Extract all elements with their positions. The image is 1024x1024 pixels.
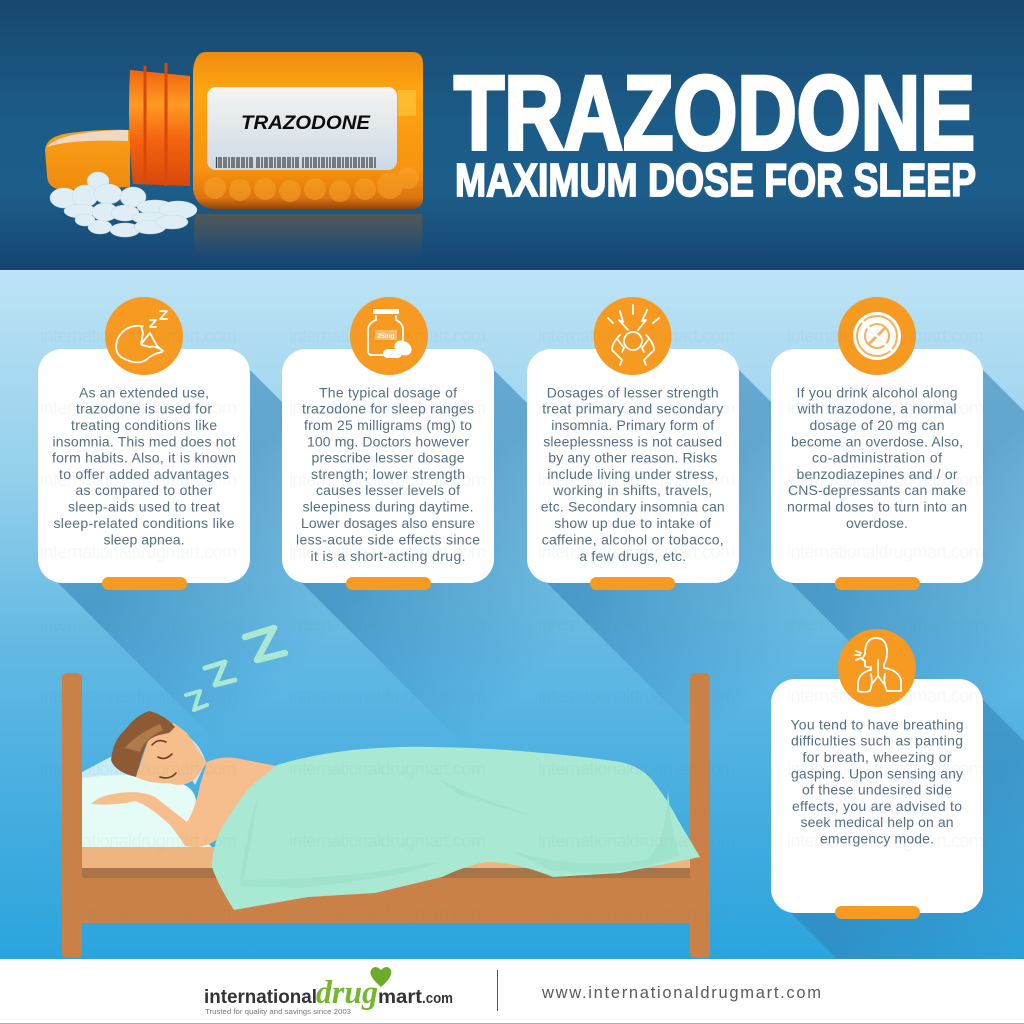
card 3 text: sleeplessness is not caused xyxy=(543,433,722,449)
card 5 text: seek medical help on an xyxy=(800,814,954,830)
light blue page background xyxy=(0,270,1024,959)
logo tagline: Trusted for quality and savings since 2003 xyxy=(205,1007,351,1016)
card 4 text: CNS-depressants can make xyxy=(788,482,966,498)
card 2 text: strength; lower strength xyxy=(311,466,465,482)
card 2 text: less-acute side effects since xyxy=(296,532,480,548)
card 4 text: co-administration of xyxy=(812,450,942,466)
bed frame xyxy=(82,878,690,923)
illustration: pill bottle xyxy=(45,52,423,258)
card 2 text: 100 mg. Doctors however xyxy=(307,433,469,449)
logo drug: drug xyxy=(316,975,378,1011)
card 5 background xyxy=(771,679,983,913)
card 1 icon: sleeping head xyxy=(105,297,183,375)
card 5 text: emergency mode. xyxy=(820,830,934,846)
card 4 text: normal doses to turn into an xyxy=(787,498,967,514)
watermark rows: internationaldrugmart.com xyxy=(787,759,984,779)
watermark rows: internationaldrugmart.com xyxy=(40,326,237,346)
card 3 text: treat primary and secondary xyxy=(542,401,723,417)
face xyxy=(136,723,207,785)
footer background xyxy=(0,959,1024,1024)
card 4 background xyxy=(771,349,983,583)
watermark rows: internationaldrugmart.com xyxy=(289,903,486,923)
watermark rows xyxy=(40,326,984,923)
card 4 accent pill xyxy=(835,577,920,590)
hair highlight xyxy=(125,724,163,752)
bottle cap xyxy=(45,130,130,190)
card 3 background xyxy=(527,349,739,583)
watermark rows: internationaldrugmart.com xyxy=(40,398,237,418)
watermark rows: internationaldrugmart.com xyxy=(40,470,237,490)
bed post right xyxy=(690,673,710,958)
card 3 icon: stress head in hands xyxy=(594,297,672,375)
watermark rows: internationaldrugmart.com xyxy=(40,542,237,562)
card 5 accent pill xyxy=(835,906,920,919)
watermark rows: internationaldrugmart.com xyxy=(787,398,984,418)
watermark rows: internationaldrugmart.com xyxy=(289,470,486,490)
card 2 xyxy=(282,297,494,590)
card 1 text: As an extended use, xyxy=(79,384,209,400)
watermark rows: internationaldrugmart.com xyxy=(538,326,735,346)
card 1 text: to offer added advantages xyxy=(59,466,229,482)
header band xyxy=(0,0,1024,270)
card 1 text: sleep-related conditions like xyxy=(54,515,235,531)
right side highlight xyxy=(398,90,416,116)
card 4 text: become an overdose. Also, xyxy=(791,433,963,449)
illustration: sleeping man in bed xyxy=(62,628,710,958)
card 3 text: Dosages of lesser strength xyxy=(547,384,719,400)
watermark rows: internationaldrugmart.com xyxy=(40,831,237,851)
card 4 text: If you drink alcohol along xyxy=(796,384,958,400)
watermark rows: internationaldrugmart.com xyxy=(289,326,486,346)
card 3 text: insomnia. Primary form of xyxy=(551,417,714,433)
card 2 text: sleepiness during daytime. xyxy=(302,498,474,514)
watermark rows: internationaldrugmart.com xyxy=(538,542,735,562)
card 1 text: as compared to other xyxy=(76,482,213,498)
card 4 icon: no pills xyxy=(838,297,916,375)
card 5 icon: lungs xyxy=(838,629,916,707)
card 1 background xyxy=(38,349,250,583)
mattress shadow strip xyxy=(82,868,690,878)
watermark rows: internationaldrugmart.com xyxy=(289,831,486,851)
card 2 text xyxy=(296,384,480,564)
card 2 text: trazodone for sleep ranges xyxy=(302,401,474,417)
card 5 text: You tend to have breathing xyxy=(790,716,964,732)
card 3 text xyxy=(541,384,725,564)
card 4 text: with trazodone, a normal xyxy=(796,401,956,417)
card 1 text: insomnia. This med does not xyxy=(52,433,236,449)
card 2 accent pill xyxy=(346,577,431,590)
card 2 text: Lower dosages also ensure xyxy=(301,515,475,531)
logo xyxy=(204,967,453,1016)
card 4 text: benzodiazepines and / or xyxy=(796,466,958,482)
card 3 text: by any other reason. Risks xyxy=(548,450,717,466)
watermark rows: internationaldrugmart.com xyxy=(289,686,486,706)
card 2 icon: pill jar: 25mg xyxy=(378,333,395,340)
watermark rows: internationaldrugmart.com xyxy=(538,614,735,634)
watermark rows: internationaldrugmart.com xyxy=(787,542,984,562)
watermark rows: internationaldrugmart.com xyxy=(538,831,735,851)
footer divider xyxy=(497,970,498,1011)
card 4 text: overdose. xyxy=(846,515,908,531)
body and arm xyxy=(91,758,277,847)
watermark rows: internationaldrugmart.com xyxy=(40,903,237,923)
watermark rows: internationaldrugmart.com xyxy=(787,326,984,346)
card 5 text: difficulties such as panting xyxy=(791,733,963,749)
card 5 text xyxy=(790,716,964,846)
cap rim highlight xyxy=(47,130,128,147)
ear xyxy=(172,727,190,749)
watermark rows: internationaldrugmart.com xyxy=(538,759,735,779)
footer bottom line xyxy=(0,1023,1024,1024)
card 1 text: treating conditions like xyxy=(71,417,217,433)
card 4 text: dosage of 20 mg can xyxy=(810,417,944,433)
watermark rows: internationaldrugmart.com xyxy=(289,759,486,779)
card 5 xyxy=(771,629,983,919)
watermark rows: internationaldrugmart.com xyxy=(787,831,984,851)
bottle reflection xyxy=(194,214,423,258)
watermark rows: internationaldrugmart.com xyxy=(40,686,237,706)
watermark rows: internationaldrugmart.com xyxy=(538,398,735,418)
card 1 text: form habits. Also, it is known xyxy=(52,450,236,466)
bed post left xyxy=(62,673,82,958)
card 1 accent pill xyxy=(102,577,187,590)
watermark rows: internationaldrugmart.com xyxy=(538,686,735,706)
watermark rows: internationaldrugmart.com xyxy=(787,470,984,490)
logo mart: mart xyxy=(378,987,423,1008)
card 2 text: causes lesser levels of xyxy=(316,482,460,498)
card 2 text: it is a short-acting drug. xyxy=(310,548,466,564)
blanket folds xyxy=(240,778,680,888)
card 4 text xyxy=(787,384,967,531)
bottle label xyxy=(207,87,397,170)
logo com: .com xyxy=(422,990,453,1007)
watermark rows: internationaldrugmart.com xyxy=(289,398,486,418)
watermark rows: internationaldrugmart.com xyxy=(289,542,486,562)
watermark rows: internationaldrugmart.com xyxy=(538,903,735,923)
watermark rows: internationaldrugmart.com xyxy=(538,470,735,490)
logo wordmark: international xyxy=(204,987,317,1008)
card 3 text: working in shifts, travels, xyxy=(552,482,712,498)
card 4 xyxy=(771,297,983,590)
card 3 text: include living under stress, xyxy=(547,466,718,482)
website url: www.internationaldrugmart.com xyxy=(541,984,821,1002)
card 1 text xyxy=(52,384,236,548)
card 3 text: etc. Secondary insomnia can xyxy=(541,498,725,514)
card 2 text: The typical dosage of xyxy=(319,384,457,400)
card 3 text: show up due to intake of xyxy=(554,515,711,531)
card 2 background xyxy=(282,349,494,583)
watermark rows: internationaldrugmart.com xyxy=(40,759,237,779)
card 1 text: sleep apnea. xyxy=(104,532,184,548)
closed eye, brow, and smile xyxy=(152,741,176,778)
card 3 xyxy=(527,297,739,590)
card 2 icon: pill jar xyxy=(350,297,428,375)
pills seen through bottle xyxy=(204,167,419,202)
watermark rows: internationaldrugmart.com xyxy=(787,614,984,634)
card 2 text: prescribe lesser dosage xyxy=(312,450,465,466)
card 1 text: trazodone is used for xyxy=(76,401,212,417)
card 5 text: gasping. Upon sensing any xyxy=(791,765,963,781)
watermark rows: internationaldrugmart.com xyxy=(787,686,984,706)
card 1 xyxy=(38,297,250,590)
bottle body xyxy=(193,52,423,209)
card 3 accent pill xyxy=(590,577,675,590)
blanket xyxy=(212,747,700,910)
watermark rows: internationaldrugmart.com xyxy=(289,614,486,634)
hair xyxy=(111,711,175,777)
bottle label text: TRAZODONE xyxy=(241,113,371,134)
spilled pills xyxy=(50,172,197,237)
watermark rows: internationaldrugmart.com xyxy=(40,614,237,634)
card 5 text: of these undesired side xyxy=(802,782,952,798)
back pillow xyxy=(82,738,206,790)
barcode xyxy=(216,157,375,168)
logo heart xyxy=(370,967,391,987)
card 3 text: a few drugs, etc. xyxy=(579,548,686,564)
footer xyxy=(0,959,1024,1024)
card 5 text: effects, you are advised to xyxy=(792,798,962,814)
neck threads xyxy=(145,63,166,186)
card 5 text: for breath, wheezing or xyxy=(802,749,952,765)
card 1 text: sleep-aids used to treat xyxy=(68,498,220,514)
pillow xyxy=(82,775,212,847)
mattress xyxy=(82,847,690,868)
bottle neck xyxy=(129,70,190,186)
card 2 text: from 25 milligrams (mg) to xyxy=(304,417,472,433)
snore letters xyxy=(186,628,285,710)
long card shadows xyxy=(58,363,1024,959)
card 3 text: caffeine, alcohol or tobacco, xyxy=(542,532,724,548)
